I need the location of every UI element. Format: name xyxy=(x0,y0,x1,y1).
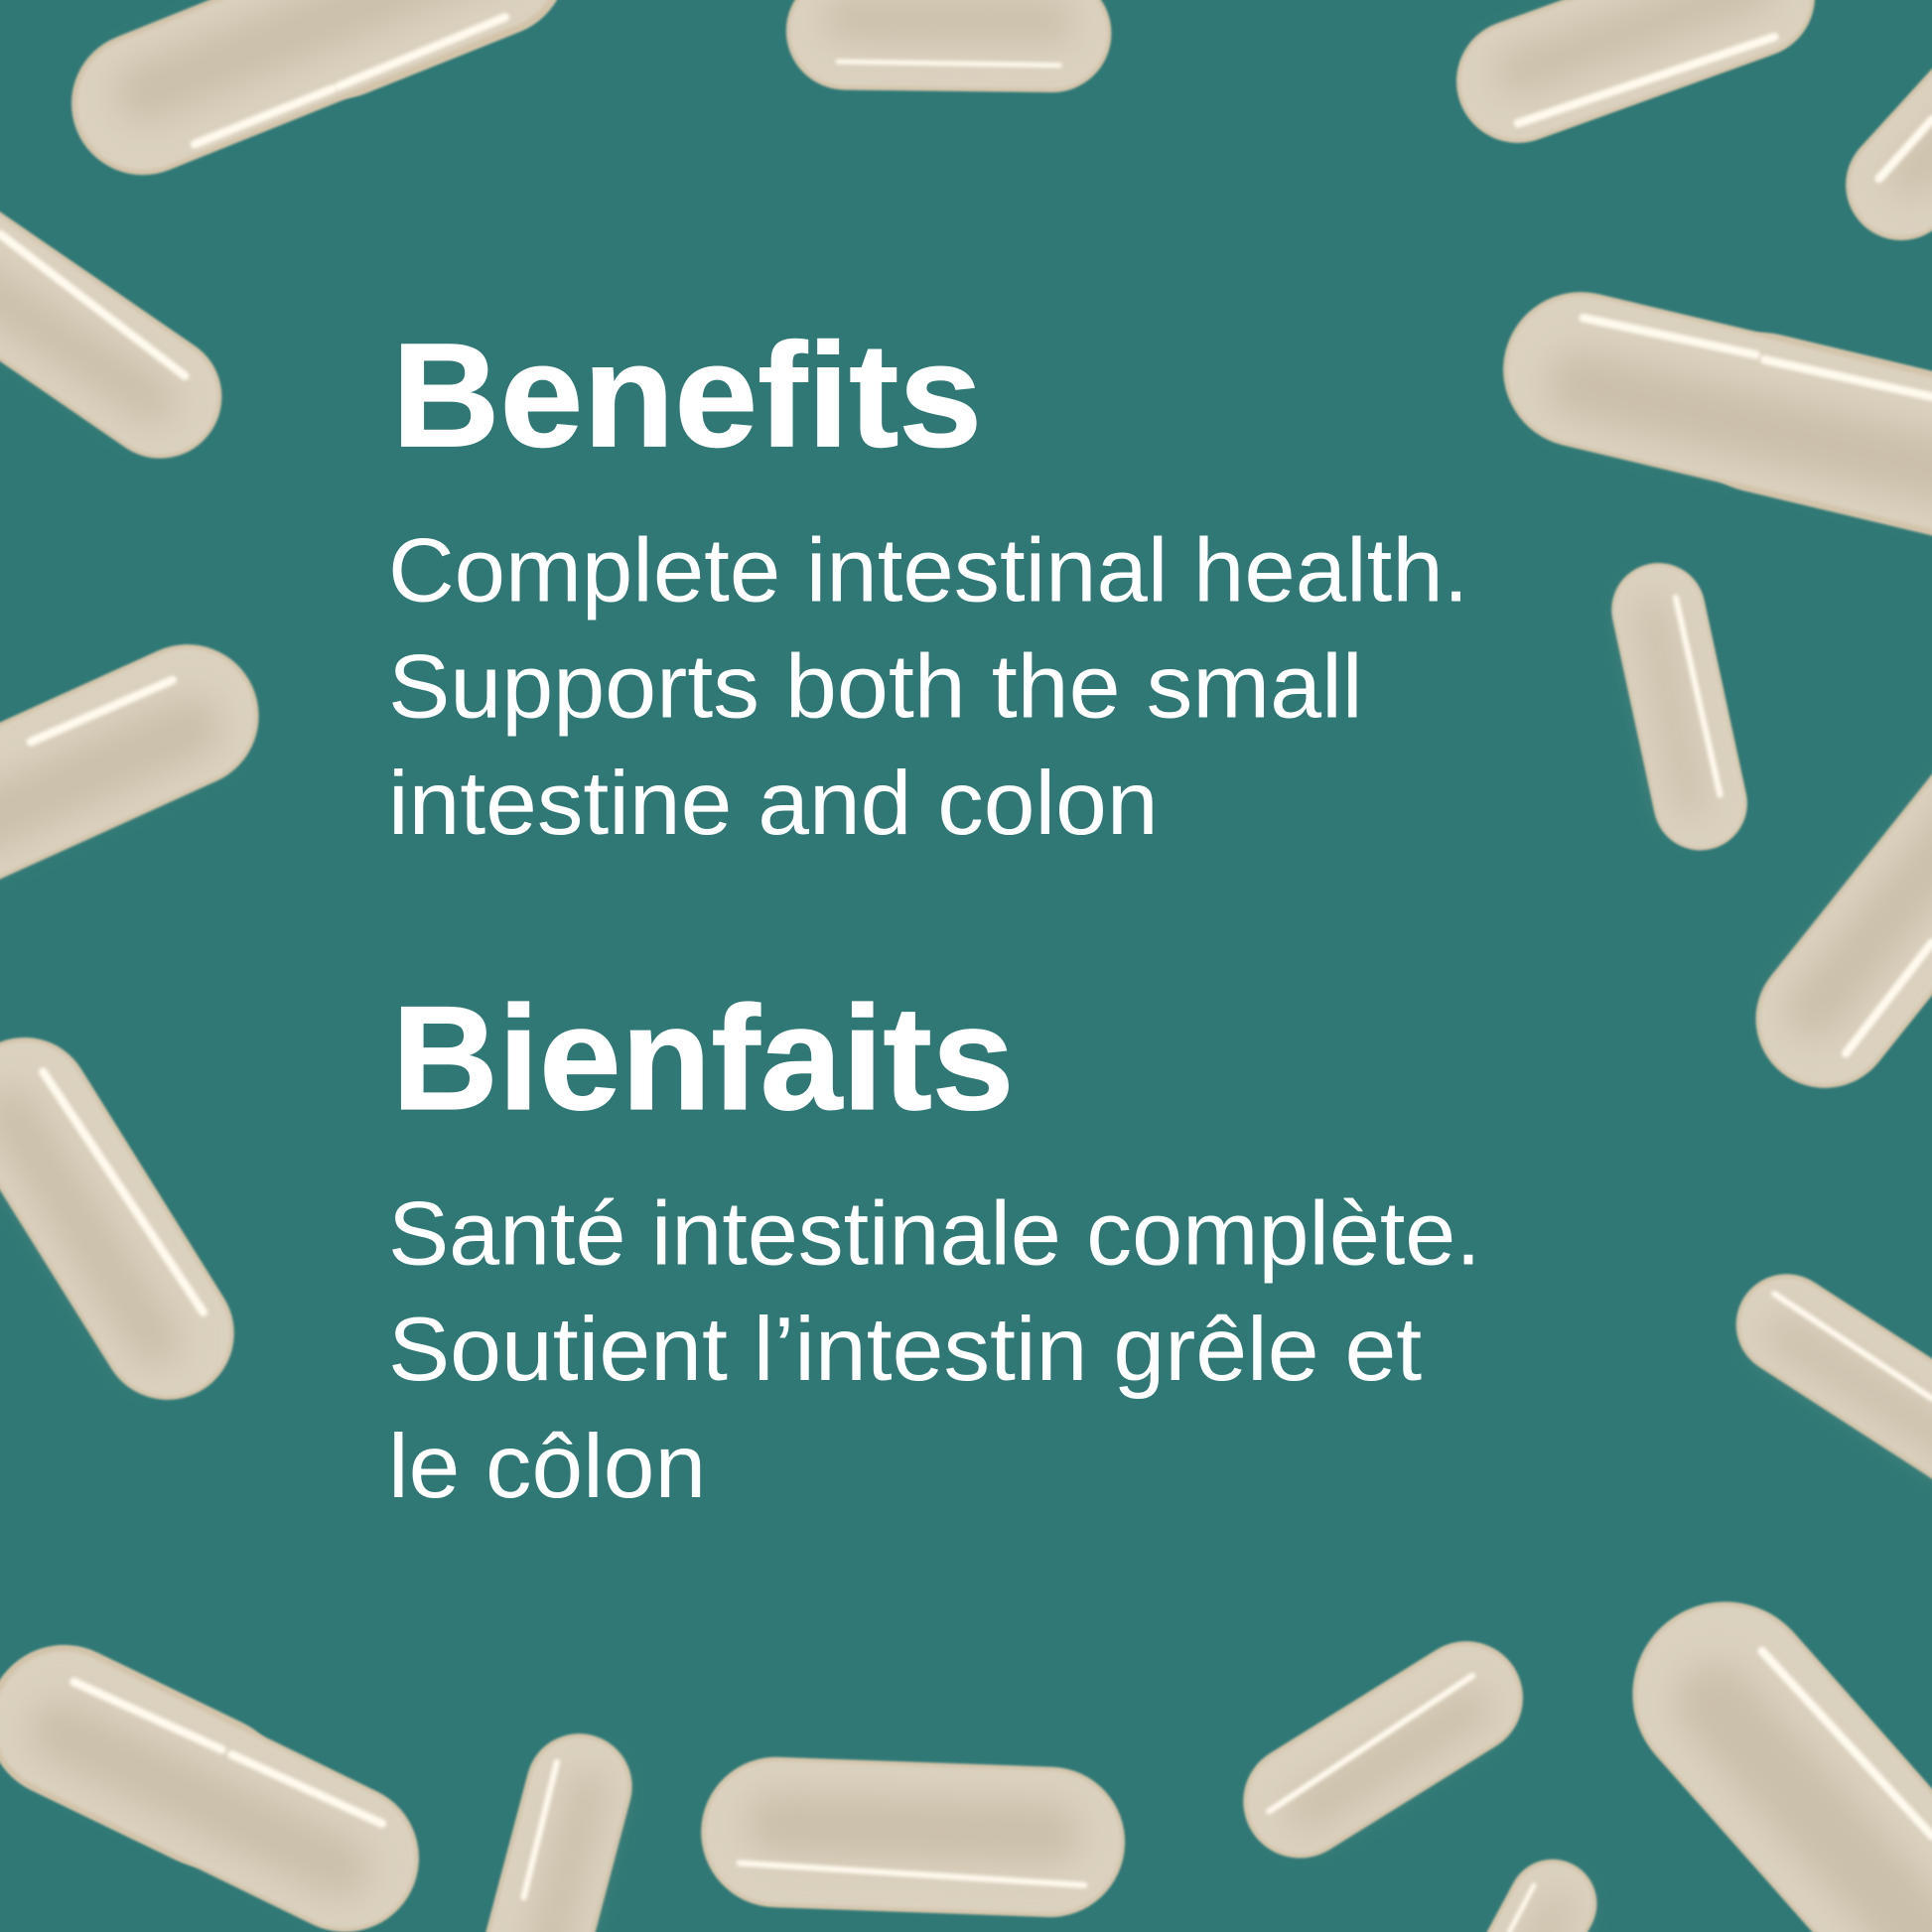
capsule: left middle xyxy=(0,680,191,834)
capsule: bottom left xyxy=(60,1682,382,1867)
text block: French benefits: Santé intestinale complète. xyxy=(388,1183,1481,1284)
text block: French benefits xyxy=(388,1183,1481,1517)
capsule: right lower xyxy=(1774,1294,1932,1468)
capsule: right small xyxy=(1651,598,1721,803)
heading: Bienfaits: Bienfaits xyxy=(392,975,1014,1141)
text block: English benefits: Complete intestinal health. xyxy=(388,521,1468,621)
text block: English benefits: Supports both the small xyxy=(388,636,1363,737)
capsule: bottom right large xyxy=(1716,1651,1932,1932)
heading: Benefits: Benefits xyxy=(392,312,982,478)
capsule: top left xyxy=(143,0,505,144)
capsule: top centre xyxy=(838,19,1059,66)
capsule: bottom right small xyxy=(1269,1676,1472,1811)
text block: French benefits: le côlon xyxy=(388,1417,706,1517)
capsule: left lower xyxy=(10,1072,204,1342)
capsule: top right xyxy=(1518,0,1774,123)
capsule: bottom corner small xyxy=(1509,1885,1559,1932)
text block: English benefits xyxy=(388,521,1468,854)
capsule: right middle xyxy=(1814,765,1932,1053)
capsule: bottom small xyxy=(523,1762,589,1932)
capsule: bottom centre xyxy=(740,1824,1084,1885)
capsule: right large xyxy=(1581,318,1932,489)
text block: English benefits: intestine and colon xyxy=(388,754,1159,854)
text block: French benefits: Soutient l’intestin grêle et xyxy=(388,1300,1422,1400)
capsule: top right corner xyxy=(1879,73,1932,185)
capsule: left upper xyxy=(0,234,185,402)
